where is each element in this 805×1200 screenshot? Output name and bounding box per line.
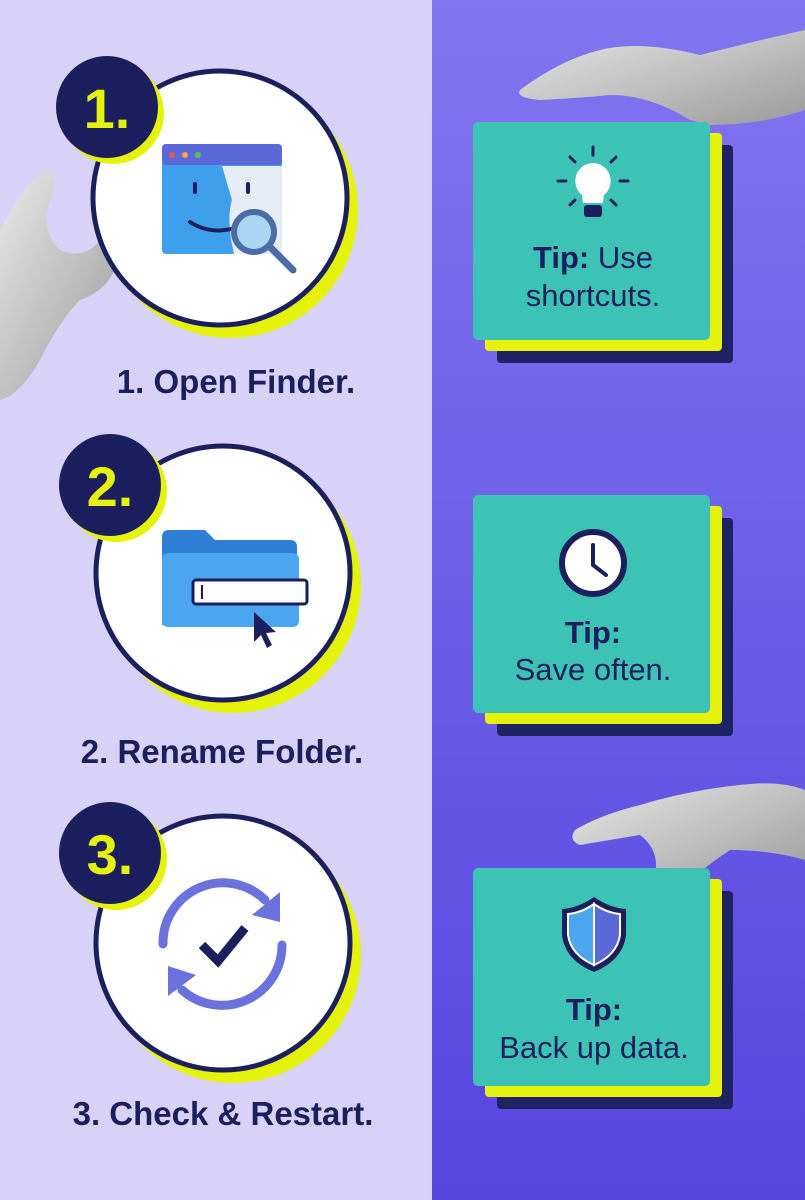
badge 3 (59, 802, 167, 910)
step 3 circle (96, 816, 361, 1083)
card 3: back up data (473, 868, 733, 1109)
icon: bulb (558, 147, 628, 217)
card 2: save often: Tip: (565, 615, 621, 650)
label 1: 1. Open Finder. (117, 363, 355, 400)
badge 2 (59, 434, 167, 542)
label 3: 3. Check & Restart. (73, 1095, 373, 1132)
badge 1: 1. (84, 77, 130, 140)
label 2: 2. Rename Folder. (81, 733, 363, 770)
hand: left (0, 170, 118, 400)
card 3: back up data: Tip: (566, 992, 622, 1027)
badge 2: 2. (87, 455, 133, 518)
icon: refresh check (163, 883, 282, 1005)
step 1 circle (93, 71, 358, 338)
card 1: shortcuts: Tip: Use (533, 240, 653, 275)
icon: shield (562, 897, 626, 972)
card 1: shortcuts (473, 122, 733, 363)
badge 1 (56, 56, 164, 164)
card 3: back up data: Back up data. (499, 1030, 689, 1065)
step 2 circle (96, 446, 361, 713)
hand: top right (519, 30, 805, 125)
icon: clock (562, 532, 624, 594)
card 1: shortcuts: shortcuts. (526, 278, 660, 313)
badge 3: 3. (87, 823, 133, 886)
hand: bottom right (572, 783, 805, 891)
icon: finder (162, 144, 293, 270)
card 2: save often (473, 495, 733, 736)
card 2: save often: Save often. (515, 652, 671, 687)
icon: folder (162, 530, 307, 648)
